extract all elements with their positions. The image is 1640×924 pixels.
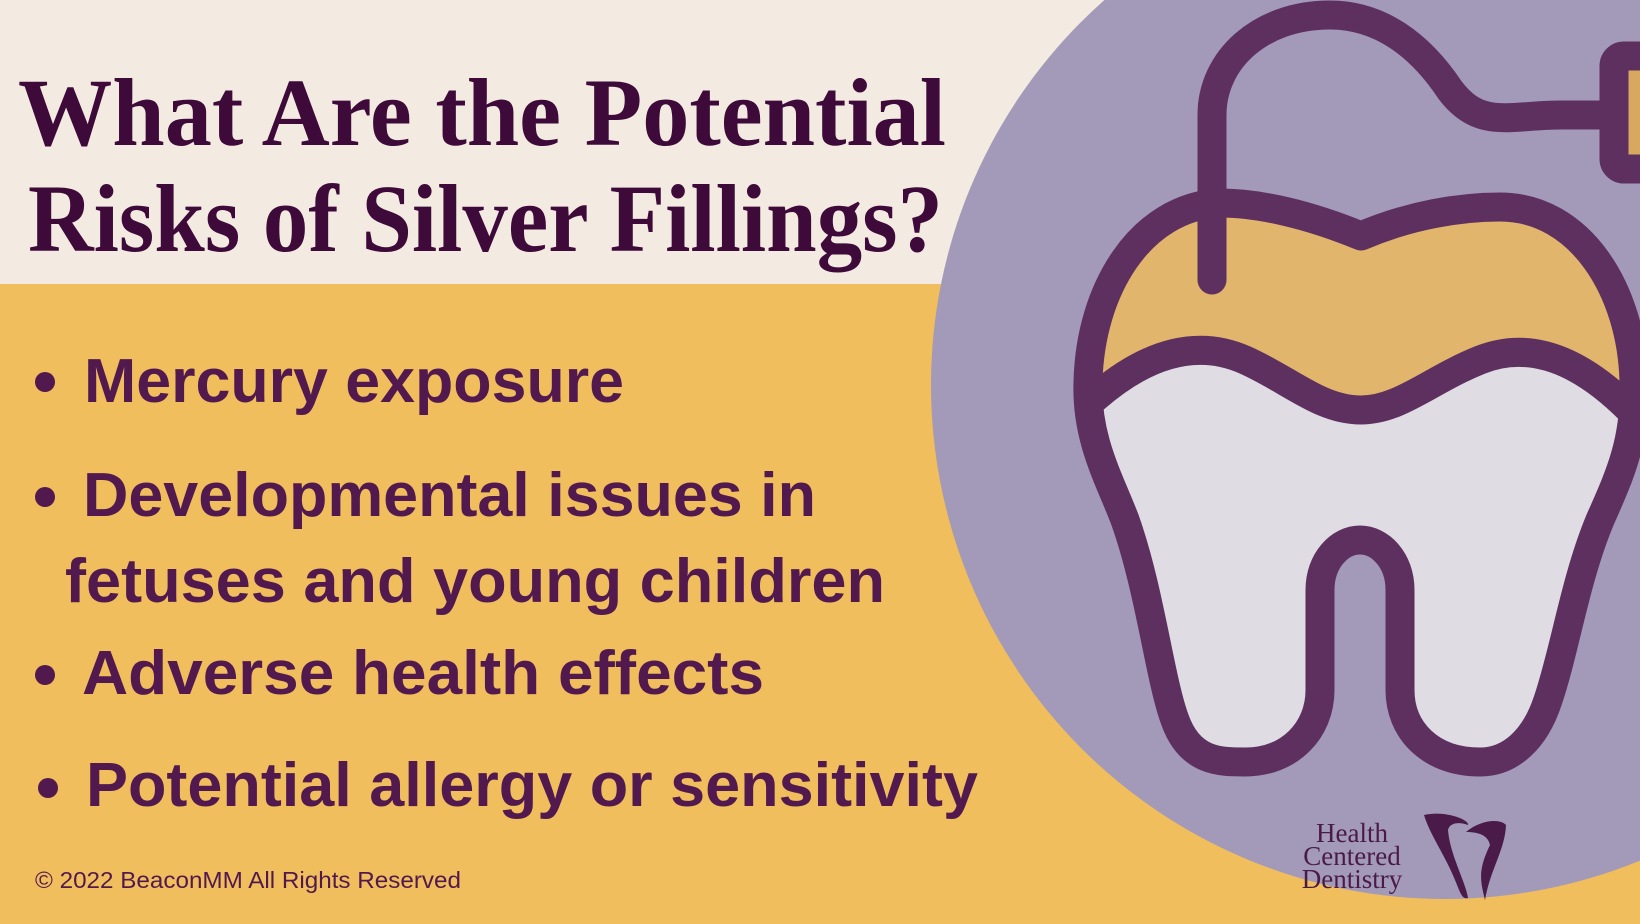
bullet 2 — [35, 461, 885, 616]
gold filling — [1102, 218, 1620, 396]
filling boundary wave — [1095, 350, 1630, 410]
copyright: © 2022 BeaconMM All Rights Reserved — [35, 867, 461, 893]
background: beige header band — [0, 0, 1640, 284]
logo text: Dentistry — [1302, 864, 1403, 894]
dental probe — [1212, 15, 1610, 280]
logo icon — [1424, 814, 1506, 900]
bullet 1: Mercury exposure — [84, 347, 624, 416]
title: What Are the Potential — [18, 59, 946, 166]
logo — [1302, 814, 1506, 900]
bullet 4: Potential allergy or sensitivity — [86, 751, 979, 820]
tooth white body — [1104, 364, 1618, 748]
title: Risks of Silver Fillings? — [28, 165, 943, 272]
icon: tooth with filling — [1060, 15, 1640, 762]
bullet 2: Developmental issues in — [83, 461, 816, 530]
bullet 2: fetuses and young children — [65, 547, 885, 616]
logo text: Health — [1316, 818, 1388, 848]
bullet 3: Adverse health effects — [82, 639, 764, 708]
purple circle panel — [931, 0, 1640, 899]
title — [18, 59, 946, 272]
tooth outline — [1088, 203, 1634, 762]
logo text: Centered — [1303, 841, 1401, 871]
probe handle — [1614, 56, 1640, 169]
bullet list — [35, 347, 979, 820]
logo text — [1302, 818, 1403, 894]
